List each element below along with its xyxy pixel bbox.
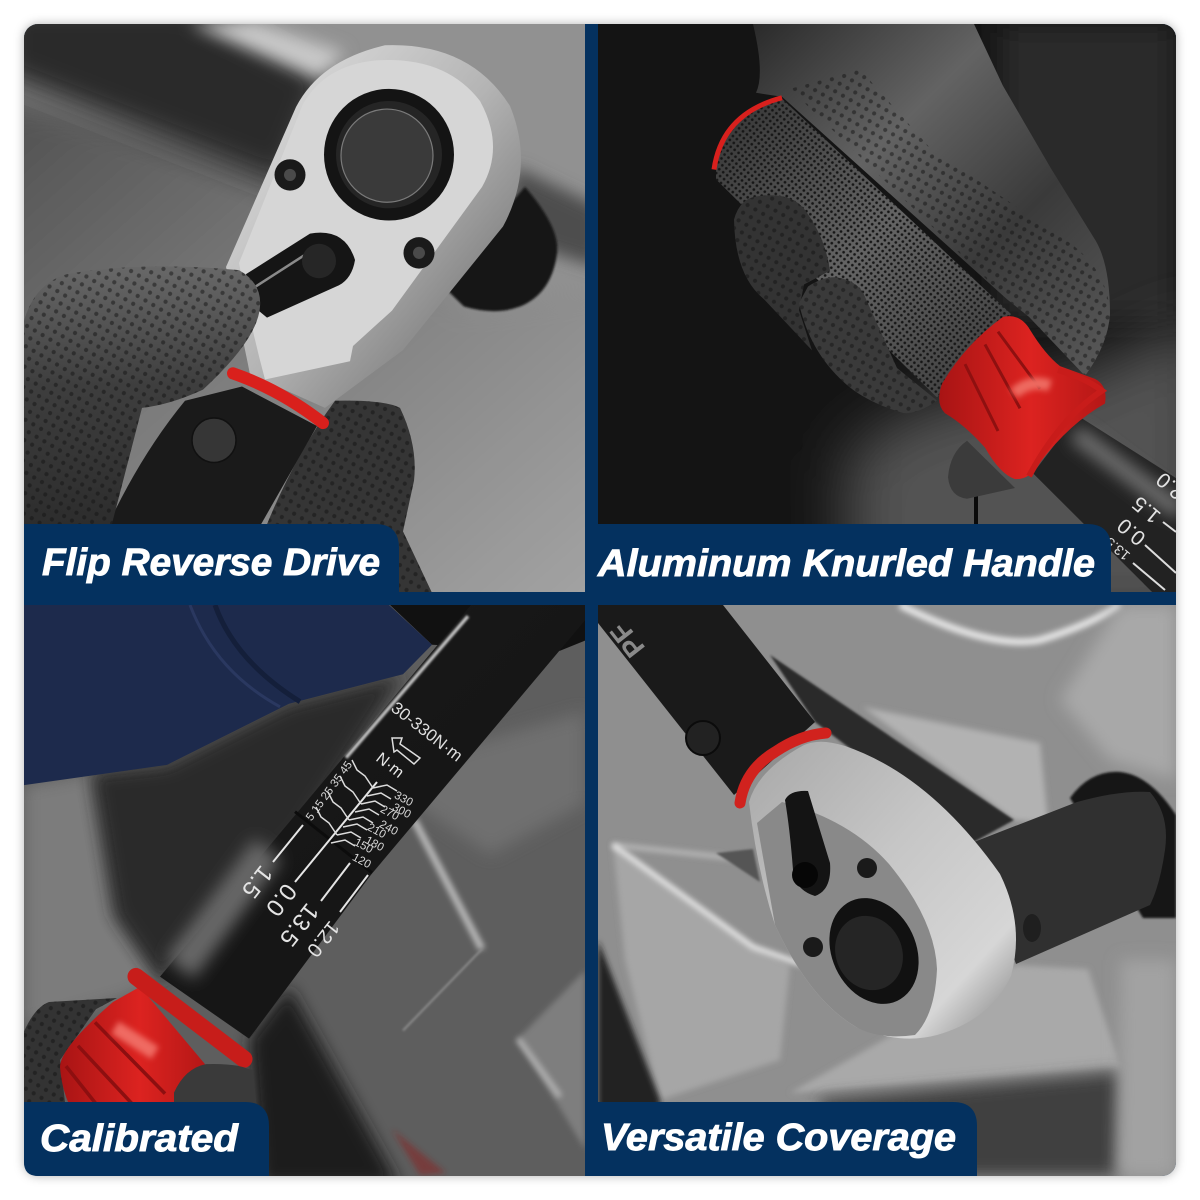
red ring [233,373,323,423]
shaft scale marks: 0.0 [1113,513,1150,550]
label: versatile coverage [585,1102,977,1176]
drive square [324,89,454,220]
lower glove fingers [267,401,435,599]
printed brand letters: PF [604,616,651,663]
panel: flip reverse drive [24,24,585,592]
scale labels: 330 [392,790,415,809]
navy divider: horizontal [24,592,1176,605]
scale labels: 240 [377,819,400,838]
socket behind the ratchet head [440,187,557,311]
glove at lower left [24,998,117,1102]
scale labels: 13.5 [274,898,324,951]
black shaft [1034,418,1176,592]
knurled aluminum handle [716,99,1011,398]
shaft scale marks: 13.5 [1102,534,1133,564]
scale labels: 210 [365,822,388,841]
label: calibrated: Calibrated [40,1118,239,1160]
scale labels: 270 [378,804,401,823]
lower fingertip [948,441,1015,499]
scale labels: 1.5 [236,860,278,903]
red collar [939,316,1106,479]
scale labels: 120 [350,852,373,871]
red ring [740,733,826,803]
shaft scale marks: 1.5 [1128,491,1165,528]
background: dark underside [92,674,403,982]
navy divider: vertical [585,24,598,1176]
handle button [192,418,236,462]
wheel spokes [598,605,1176,1176]
scale labels: 12.0 [302,917,343,961]
panel: versatile coverage [598,605,1176,1176]
stand line [974,496,978,524]
background: spoke surfaces [425,715,585,852]
scale labels: 150 [352,837,375,856]
panel: calibrated [24,605,585,1186]
label: flip reverse drive [24,524,399,592]
red end ring on handle [714,98,782,169]
faint red reflection [392,1129,446,1175]
socket hole [1023,914,1041,942]
shaft scale marks [1110,474,1176,591]
scale labels: 5 15 25 35 45 [304,759,355,823]
flip reverse lever [246,233,355,318]
drive square [813,883,935,1019]
shaft button [686,721,720,755]
screw heads [803,858,877,957]
label: versatile coverage: Versatile Coverage [601,1117,956,1159]
shaft scale marks: 2.0 [1152,467,1189,504]
panel: aluminum knurled handle [598,24,1200,630]
reverse lever [785,791,830,896]
background: left gray area [24,773,160,1027]
scale labels: 300 [390,802,413,821]
dark wheel hub behind socket [1070,772,1176,918]
scale labels: 30-330N·m [388,698,466,766]
glove finger right of collar [174,1064,252,1102]
screw heads [274,159,434,269]
label: aluminum knurled handle [585,524,1111,592]
ratchet head silver [749,742,1016,1039]
black socket extension [974,792,1166,964]
label: calibrated [24,1102,269,1176]
glove upper palm [753,24,1110,376]
gloved thumb and hand [24,266,260,531]
ratchet head silver [226,45,521,408]
label: aluminum knurled handle: Aluminum Knurled Handle [597,543,1095,585]
black handle [105,387,317,531]
dark corner behind sleeve [390,605,585,651]
black wrench shaft [598,605,815,795]
wrench shaft [160,605,585,1039]
scale labels: 180 [363,835,386,854]
blue sleeve [24,605,432,785]
lower red collar and grip [60,977,244,1114]
label: flip reverse drive: Flip Reverse Drive [42,542,380,584]
scale labels: N·m [373,750,407,782]
scale labels [236,698,466,961]
glove fingers [734,195,937,413]
scale labels: 0.0 [260,878,302,921]
